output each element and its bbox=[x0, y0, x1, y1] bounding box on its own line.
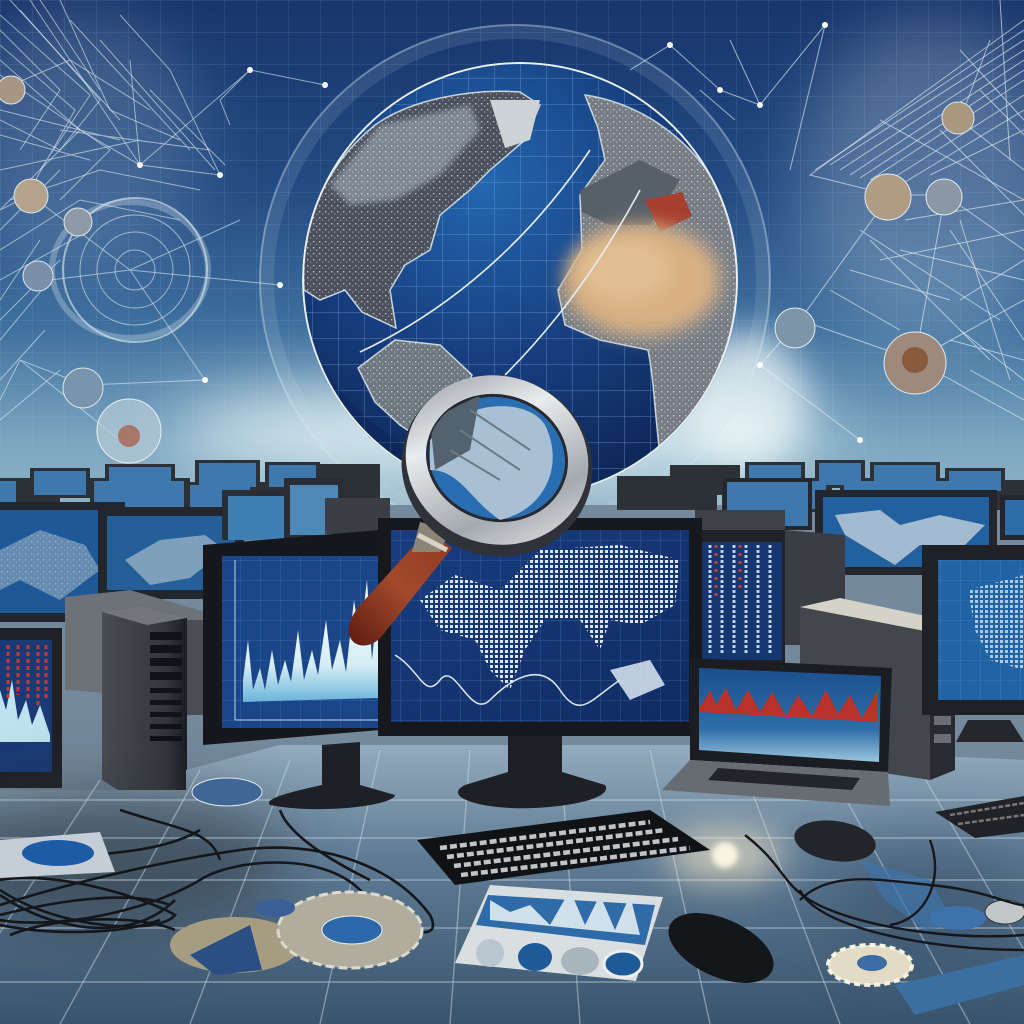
magnifying glass bbox=[348, 375, 592, 646]
continent: North America bbox=[304, 91, 540, 328]
monitor: right edge map bbox=[922, 545, 1024, 742]
keyboard bbox=[417, 810, 710, 885]
continent: South America bbox=[357, 339, 473, 431]
tower: left front bbox=[102, 606, 187, 808]
monitor: left chart bbox=[203, 530, 395, 809]
monitor stand bbox=[458, 736, 606, 808]
monitor: back left wide bbox=[0, 502, 125, 622]
bar chart bbox=[243, 580, 378, 702]
globe bbox=[300, 60, 740, 500]
continent: Europe and Africa bbox=[558, 95, 737, 468]
monitor: back right map bbox=[695, 480, 1024, 575]
paper: blue ellipse document bbox=[0, 832, 115, 878]
monitor: back mid left bbox=[222, 478, 390, 540]
equipment backdrop bbox=[0, 505, 1024, 790]
report sheet bbox=[455, 885, 663, 981]
monitor stand bbox=[269, 742, 395, 809]
flight arcs on globe bbox=[360, 150, 640, 375]
floor surface with perspective grid bbox=[0, 745, 1024, 1024]
gear cutouts bbox=[170, 892, 422, 975]
network web: right bbox=[630, 0, 1024, 440]
tower: right, behind laptop bbox=[785, 530, 955, 780]
tower: left background bbox=[65, 590, 205, 715]
handle bbox=[349, 530, 452, 646]
dotted world map bbox=[420, 545, 680, 690]
paper scraps: right bbox=[860, 860, 1024, 1015]
network nodes: right bbox=[667, 22, 974, 443]
network nodes: left bbox=[0, 67, 328, 463]
small gear: right bbox=[828, 945, 912, 985]
globe halo ring bbox=[260, 25, 770, 535]
striped disc bbox=[192, 778, 262, 806]
laptop bbox=[662, 658, 892, 806]
back row monitors bbox=[0, 460, 1024, 512]
monitor: left edge red chart bbox=[0, 628, 62, 788]
monitor: back left small bbox=[98, 507, 244, 599]
keyboard: right edge bbox=[935, 796, 1024, 838]
cables and papers, left bbox=[0, 810, 433, 935]
monitor: narrow data screen behind main bbox=[695, 530, 785, 665]
monitor: main world map bbox=[378, 518, 702, 808]
cables, right bbox=[745, 835, 1024, 950]
mouse: front bbox=[658, 899, 784, 997]
rim bbox=[384, 352, 610, 568]
lens bbox=[413, 380, 581, 536]
mouse: back bbox=[792, 815, 878, 867]
network web: left bbox=[0, 0, 325, 440]
rim back bbox=[378, 351, 616, 581]
